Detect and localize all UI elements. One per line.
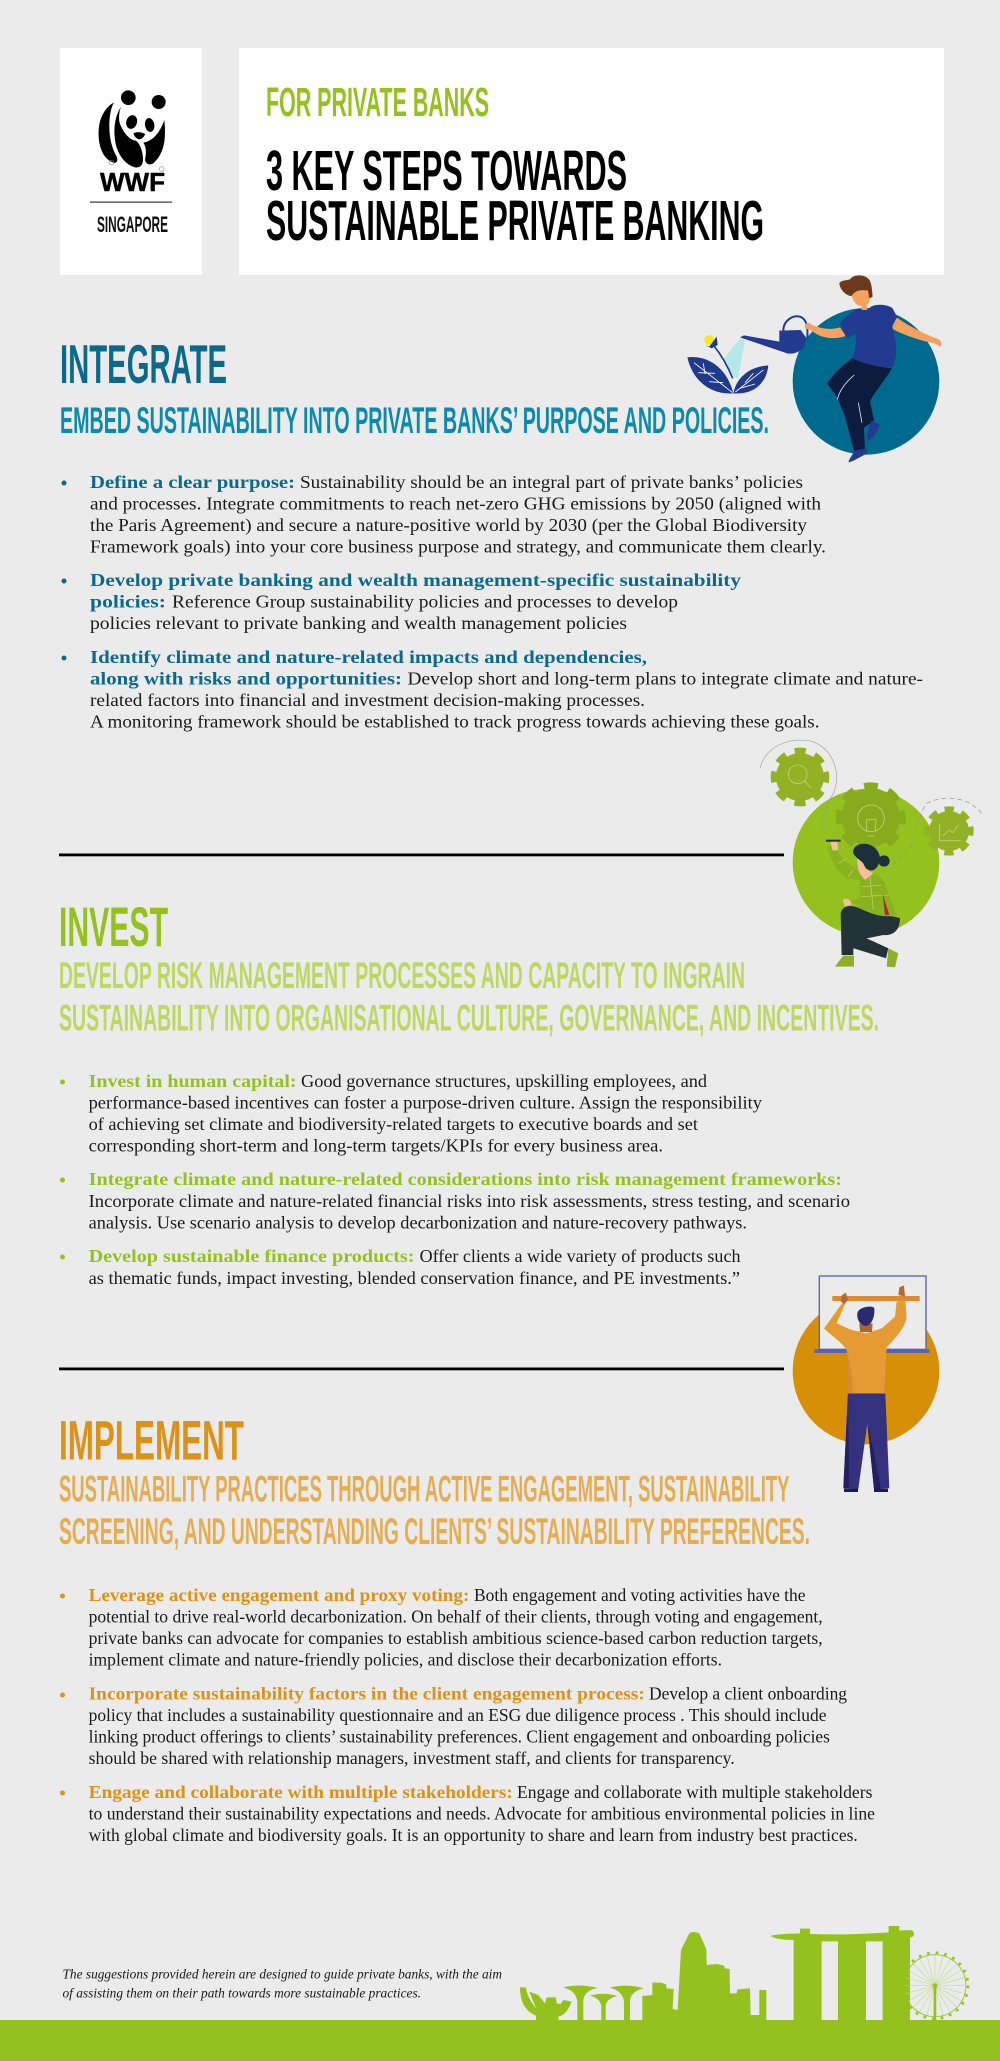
bullet: stakeholders [60, 1782, 875, 1845]
illustration: person watering plant [687, 275, 941, 462]
title panel [239, 48, 944, 275]
heading: INVEST [59, 895, 168, 958]
section: integrate [60, 333, 923, 732]
section: invest [59, 895, 879, 1288]
bullet: develop policies: Reference Group sustainability policies and processes to develop [172, 592, 678, 612]
bullet: human capital: corresponding short-term and long-term targets/KPIs for every business area. [89, 1136, 663, 1156]
bullet: finance products: as thematic funds, impact investing, blended conservation finance, and PE investments.” [89, 1268, 740, 1288]
bullet: stakeholders: to understand their sustainability expectations and needs. Advocate for ambitious environmental policies in line [89, 1804, 875, 1824]
bullet: engagement and voting: implement climate and nature-friendly policies, and disclose their decarbonization efforts. [89, 1650, 722, 1670]
bullet: develop policies: policies: [90, 592, 166, 612]
bullet: identify impacts [62, 647, 923, 732]
bullet: stakeholders: Engage and collaborate with multiple stakeholders [517, 1782, 872, 1802]
bullet: risk frameworks: Integrate climate and nature-related considerations into risk management frameworks: [89, 1169, 842, 1189]
bullet: identify impacts: Identify climate and nature-related impacts and dependencies, [90, 647, 647, 667]
bullet: identify impacts: A monitoring framework should be established to track progress towards achieving these goals. [90, 712, 820, 732]
footnote: of assisting them on their path towards more sustainable practices. [62, 1986, 421, 2002]
bullet: develop policies: policies relevant to private banking and wealth management policies [90, 613, 627, 633]
bullet: human capital: performance-based incentives can foster a purpose-driven culture. Assign the responsibility [89, 1092, 762, 1112]
bullet: stakeholders: with global climate and biodiversity goals. It is an opportunity to share and learn from industry best practices. [89, 1825, 858, 1845]
illustration: person drawing gears [760, 740, 982, 967]
title: 3 KEY STEPS TOWARDS [266, 139, 627, 202]
bullet: develop policies [62, 570, 741, 633]
bullet: client engagement: policy that includes a sustainability questionnaire and an ESG due diligence process . This should include [89, 1705, 827, 1725]
bullet: client engagement [60, 1684, 847, 1768]
bullet: client engagement: Incorporate sustainability factors in the client engagement process: [89, 1684, 645, 1704]
bullet: risk frameworks: analysis. Use scenario analysis to develop decarbonization and nature-recovery pathways. [89, 1212, 747, 1232]
bullet: finance products [60, 1246, 740, 1288]
bullet: client engagement: linking product offerings to clients’ sustainability preferences. Client engagement and onboarding policies [89, 1726, 830, 1746]
bullet: engagement and voting: private banks can advocate for companies to establish ambitious science-based carbon reduction targets, [89, 1628, 823, 1648]
eyebrow: FOR PRIVATE BANKS [266, 79, 489, 125]
bullet: define a clear purpose: and processes. Integrate commitments to reach net-zero GHG emissions by 2050 (aligned with [90, 494, 821, 514]
title [266, 139, 764, 252]
bullet: identify impacts: Develop short and long-term plans to integrate climate and nature- [408, 668, 923, 688]
wordmark: Singapore: SINGAPORE [97, 212, 168, 237]
bullet: engagement and voting: potential to drive real-world decarbonization. On behalf of their clients, through voting and engagement, [89, 1606, 823, 1626]
heading: INTEGRATE [60, 333, 227, 395]
bullet: human capital: Good governance structures, upskilling employees, and [301, 1071, 707, 1091]
bullet: client engagement: should be shared with relationship managers, investment staff, and clients for transparency. [89, 1748, 735, 1768]
bullet: engagement and voting: Leverage active engagement and proxy voting: [89, 1585, 469, 1605]
footnote: The suggestions provided herein are designed to guide private banks, with the aim [62, 1968, 502, 1982]
section: implement [59, 1408, 875, 1845]
heading: IMPLEMENT [59, 1408, 244, 1472]
bullet: identify impacts: along with risks and opportunities: [90, 668, 402, 688]
bullet: define a clear purpose: Sustainability should be an integral part of private banks’ policies [300, 472, 803, 492]
bullet: risk frameworks: Incorporate climate and nature-related financial risks into risk assessments, stress testing, and scenario [89, 1191, 850, 1211]
footer: Singapore skyline on green band [0, 1926, 1000, 2061]
subheading [59, 1468, 810, 1552]
bullet: risk frameworks [60, 1169, 850, 1232]
bullet: stakeholders: Engage and collaborate with multiple stakeholders: [89, 1782, 513, 1802]
subheading [59, 955, 879, 1038]
icon: panda [99, 90, 166, 171]
bullet: identify impacts: related factors into financial and investment decision-making processes. [90, 690, 645, 710]
bullet: human capital: Invest in human capital: [89, 1071, 297, 1091]
bullet: human capital [60, 1071, 762, 1156]
bullet: define a clear purpose [62, 472, 826, 558]
bullet: develop policies: Develop private banking and wealth management-specific sustainability [90, 570, 741, 590]
bullet: finance products: Develop sustainable finance products: [89, 1246, 414, 1266]
bullet: engagement and voting: Both engagement and voting activities have the [474, 1585, 806, 1605]
bullet: define a clear purpose: the Paris Agreement) and secure a nature-positive world by 2030 (per the Global Biodiversity [90, 515, 807, 536]
illustration: person at board [793, 1276, 939, 1492]
bullet: finance products: Offer clients a wide variety of products such [420, 1246, 740, 1266]
bullet: define a clear purpose: Framework goals) into your core business purpose and strategy, and communicate them clearly. [90, 536, 826, 558]
bullet: engagement and voting [60, 1585, 823, 1670]
footnote [62, 1968, 502, 2002]
logo panel: WWF Singapore [60, 48, 202, 275]
bullet: define a clear purpose: Define a clear purpose: [90, 472, 295, 492]
wordmark: WWF: WWF [100, 167, 165, 197]
bullet: human capital: of achieving set climate and biodiversity-related targets to executive boards and set [89, 1114, 698, 1134]
bullet: client engagement: Develop a client onboarding [649, 1684, 847, 1704]
